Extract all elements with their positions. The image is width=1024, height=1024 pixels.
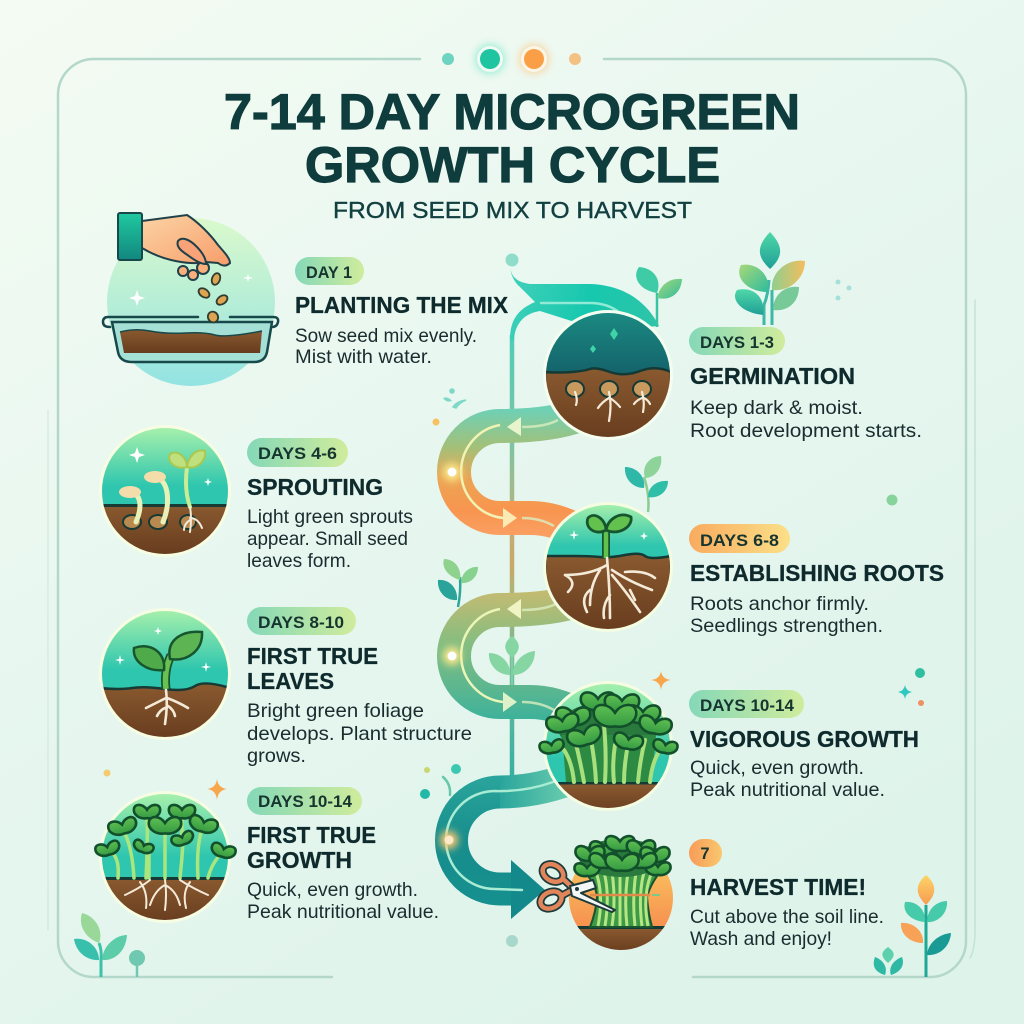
- step: first true leaves: [247, 607, 472, 767]
- plant: top right of ribbon: [636, 267, 682, 327]
- step: germination: Root development starts.: [690, 420, 922, 442]
- icon: harvest time: [538, 836, 680, 953]
- step: first true leaves: grows.: [247, 745, 306, 767]
- step: establishing roots: DAYS 6-8: [700, 532, 779, 550]
- step: planting the mix: [295, 257, 509, 368]
- step: planting the mix: Sow seed mix evenly.: [295, 325, 477, 347]
- step: vigorous growth: DAYS 10-14: [700, 697, 795, 715]
- step: first true growth: DAYS 10-14: [258, 793, 353, 811]
- title: GROWTH CYCLE: [305, 137, 720, 193]
- flow ribbon: vigorous growth to harvest: [440, 775, 580, 919]
- decorative accents: [104, 280, 925, 947]
- icon: first true leaves: [99, 608, 231, 740]
- step: sprouting: Light green sprouts: [247, 506, 413, 528]
- plant: large leaves above germination label: [735, 232, 805, 325]
- icon: establishing roots: [543, 502, 673, 632]
- title: 7-14 DAY MICROGREEN: [224, 84, 800, 140]
- step: harvest time: Wash and enjoy!: [690, 928, 832, 950]
- flow ribbon: roots to vigorous growth: [443, 599, 580, 716]
- icon: vigorous growth: [539, 681, 678, 814]
- subtitle: FROM SEED MIX TO HARVEST: [333, 197, 692, 223]
- plant: left of third ribbon: [438, 559, 478, 607]
- step: first true leaves: develops. Plant structure: [247, 723, 472, 745]
- step: harvest time: Cut above the soil line.: [690, 906, 884, 928]
- step: vigorous growth: [689, 690, 919, 801]
- step: first true leaves: LEAVES: [247, 668, 334, 694]
- plant: bottom right: [874, 875, 951, 977]
- step: establishing roots: [689, 524, 944, 637]
- step: first true growth: Peak nutritional value.: [247, 901, 439, 923]
- step: first true growth: Quick, even growth.: [247, 879, 418, 901]
- icon: true growth: [94, 791, 237, 923]
- step: sprouting: appear. Small seed: [247, 528, 408, 550]
- title: [224, 84, 800, 193]
- plant: inside ribbon loop: [489, 636, 535, 685]
- flow ribbon: start to germination: [506, 254, 659, 340]
- step: planting the mix: Mist with water.: [295, 346, 432, 368]
- step: germination: DAYS 1-3: [700, 334, 774, 352]
- central timeline stem: [510, 335, 514, 780]
- plant: bottom left: [74, 913, 145, 977]
- step: establishing roots: ESTABLISHING ROOTS: [690, 560, 944, 586]
- step: first true leaves: Bright green foliage: [247, 700, 424, 722]
- step: vigorous growth: VIGOROUS GROWTH: [690, 726, 919, 752]
- step: vigorous growth: Peak nutritional value.: [690, 779, 885, 801]
- step: first true growth: FIRST TRUE: [247, 822, 376, 848]
- step: sprouting: leaves form.: [247, 550, 351, 572]
- step: first true leaves: DAYS 8-10: [258, 614, 344, 632]
- step: harvest time: HARVEST TIME!: [690, 874, 866, 900]
- step: sprouting: DAYS 4-6: [258, 445, 337, 463]
- step: sprouting: [247, 438, 413, 572]
- step: germination: Keep dark & moist.: [690, 397, 863, 419]
- icon: planting the mix: [103, 213, 278, 386]
- header dots: [442, 44, 581, 74]
- icon: scissors: [538, 861, 615, 912]
- step: establishing roots: Roots anchor firmly.: [690, 593, 869, 615]
- step: first true growth: [247, 787, 439, 923]
- step: first true leaves: FIRST TRUE: [247, 643, 378, 669]
- step: planting the mix: DAY 1: [306, 264, 352, 282]
- step: germination: GERMINATION: [690, 363, 855, 389]
- flow ribbon: germination to roots: [443, 415, 580, 532]
- step: harvest time: 7: [700, 845, 710, 863]
- step: first true growth: GROWTH: [247, 847, 352, 873]
- step: establishing roots: Seedlings strengthen.: [690, 615, 883, 637]
- step: planting the mix: PLANTING THE MIX: [295, 292, 509, 318]
- icon: germination: [543, 310, 673, 440]
- plant: above roots icon: [625, 456, 668, 512]
- step: vigorous growth: Quick, even growth.: [690, 757, 864, 779]
- step: harvest time: [689, 839, 884, 950]
- step: germination: [689, 327, 922, 442]
- icon: sprouting: [99, 425, 231, 557]
- step: sprouting: SPROUTING: [247, 474, 383, 500]
